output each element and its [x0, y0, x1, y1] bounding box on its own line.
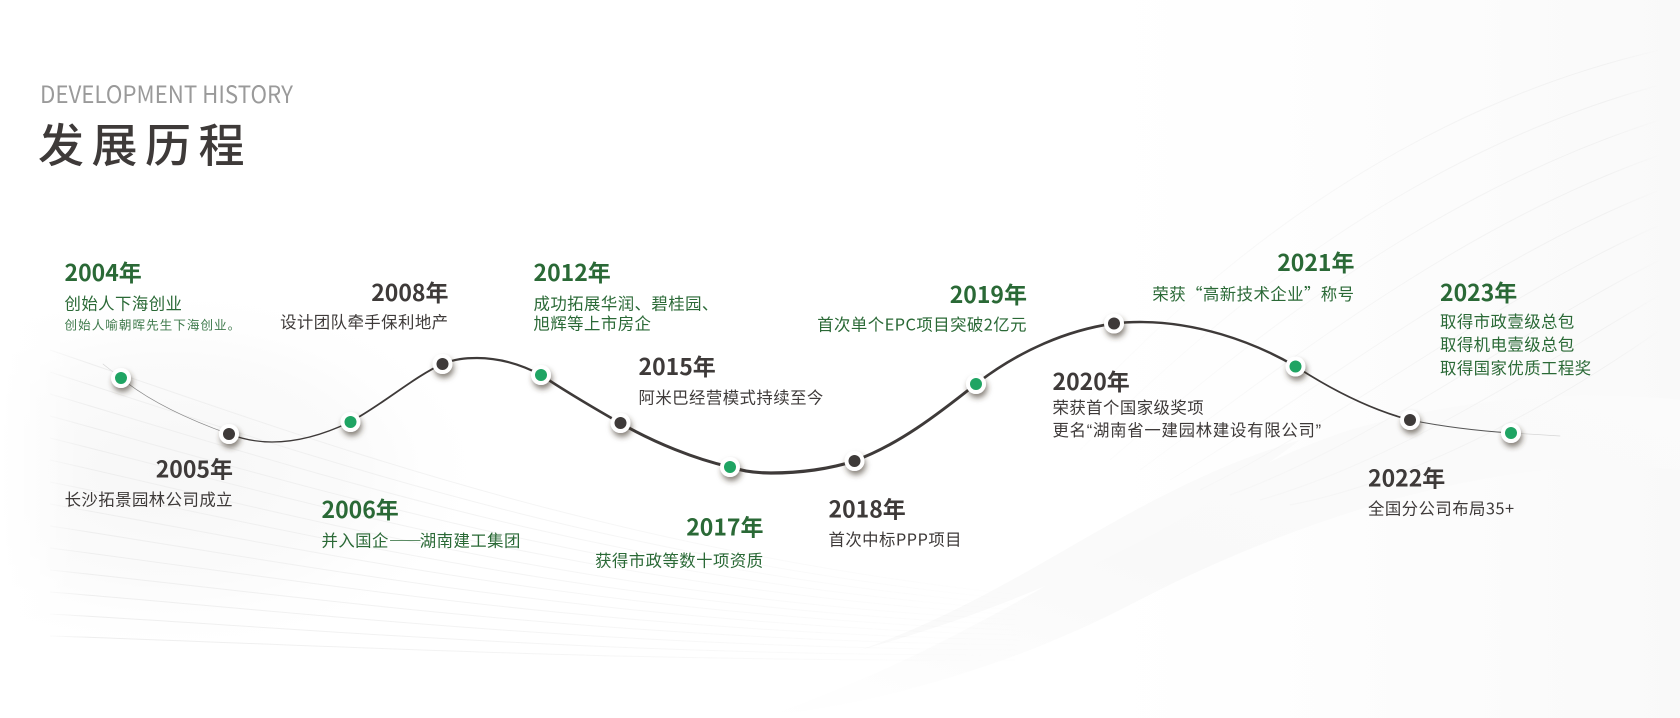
milestone 2023: 取得国家优质工程奖	[1440, 355, 1592, 379]
milestone 2004: 创始人下海创业	[64, 290, 182, 314]
milestone 2006: 2006年	[322, 491, 399, 525]
milestone 2022: 全国分公司布局35+	[1368, 496, 1515, 520]
milestone 2023	[1440, 274, 1592, 379]
milestone 2008	[280, 274, 448, 333]
milestone 2023: 取得机电壹级总包	[1440, 332, 1575, 356]
milestone 2023: 取得市政壹级总包	[1440, 308, 1575, 332]
title: 发展历程	[38, 110, 252, 176]
node 2022	[1400, 410, 1420, 430]
milestone 2017: 获得市政等数十项资质	[595, 548, 764, 572]
milestone 2023: 2023年	[1440, 274, 1517, 308]
node 2020	[1104, 314, 1124, 334]
milestone 2020: 更名“湖南省一建园林建设有限公司”	[1052, 417, 1322, 441]
milestone 2017	[595, 508, 764, 572]
milestone 2020: 荣获首个国家级奖项	[1052, 394, 1204, 418]
milestone 2019	[817, 276, 1027, 336]
node 2015	[610, 413, 630, 433]
milestone 2018: 首次中标PPP项目	[828, 526, 962, 550]
milestone 2015	[638, 348, 824, 408]
milestone 2015: 阿米巴经营模式持续至今	[638, 384, 824, 408]
milestone 2005: 2005年	[156, 450, 233, 484]
milestone 2004: 2004年	[64, 254, 142, 288]
milestone 2020	[1052, 363, 1322, 441]
node 2004	[111, 368, 131, 388]
milestone 2012	[534, 254, 719, 334]
milestone 2021	[1152, 244, 1354, 305]
milestone 2006: 并入国企——湖南建工集团	[322, 528, 521, 552]
milestone 2019: 2019年	[950, 276, 1027, 310]
milestone 2018	[828, 490, 962, 550]
node 2006	[340, 412, 360, 432]
milestone 2021: 荣获“高新技术企业”称号	[1152, 281, 1354, 305]
node 2021	[1286, 356, 1306, 376]
node 2018	[844, 451, 864, 471]
node 2017	[720, 457, 740, 477]
node 2019	[966, 374, 986, 394]
milestone 2019: 首次单个EPC项目突破2亿元	[817, 312, 1027, 336]
milestone 2004	[64, 254, 241, 334]
milestone 2021: 2021年	[1277, 244, 1354, 278]
milestone 2005: 长沙拓景园林公司成立	[65, 486, 233, 510]
node 2005	[219, 424, 239, 444]
section label: DEVELOPMENT HISTORY: DEVELOPMENT HISTORY	[40, 75, 293, 110]
milestone 2004: 创始人喻朝晖先生下海创业。	[64, 314, 241, 334]
milestone 2012: 旭辉等上市房企	[534, 310, 651, 334]
node 2008	[432, 354, 452, 374]
milestone 2015: 2015年	[638, 348, 716, 382]
milestone 2008: 2008年	[371, 274, 448, 308]
milestone 2018: 2018年	[828, 490, 906, 524]
milestone 2012: 成功拓展华润、碧桂园、	[534, 290, 719, 314]
milestone 2022	[1368, 460, 1515, 520]
milestone 2005	[65, 450, 233, 510]
milestone 2006	[322, 491, 521, 552]
milestone 2008: 设计团队牵手保利地产	[280, 309, 448, 333]
node 2023	[1501, 423, 1521, 443]
milestone 2022: 2022年	[1368, 460, 1445, 494]
milestone 2020: 2020年	[1052, 363, 1130, 397]
node 2012	[531, 365, 551, 385]
milestone 2012: 2012年	[534, 254, 611, 288]
timeline curve	[103, 322, 1560, 473]
milestone 2017: 2017年	[686, 508, 764, 542]
